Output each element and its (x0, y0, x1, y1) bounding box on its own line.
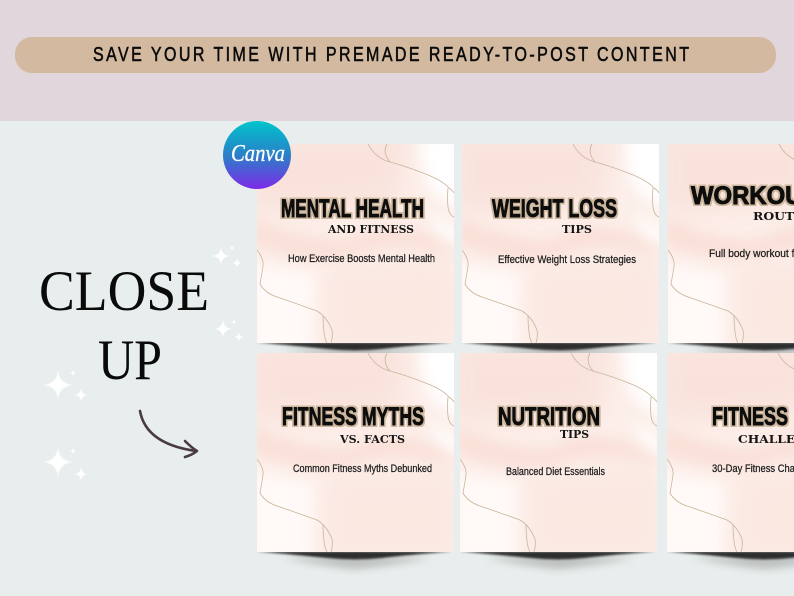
sparkles: group three (43, 369, 88, 402)
subtitle: tips: TIPS (560, 428, 589, 441)
icon: canva badge (223, 121, 291, 189)
top banner band (0, 0, 794, 121)
heading: close up: CLOSE (39, 260, 209, 323)
title: fitness myths: FITNESS MYTHS (282, 403, 424, 431)
panel: weight loss card (452, 134, 672, 360)
subtitle: and fitness: AND FITNESS (327, 223, 414, 236)
title: nutrition: NUTRITION (498, 403, 600, 431)
subtitle: tips: TIPS (562, 223, 592, 236)
sparkles: group four (43, 447, 88, 481)
caption: Common Fitness Myths Debunked (293, 463, 432, 475)
subtitle: vs facts: VS. FACTS (339, 433, 405, 446)
caption: How Exercise Boosts Mental Health (288, 253, 435, 265)
panel: nutrition card (450, 343, 670, 569)
title: weight loss: WEIGHT LOSS (492, 195, 617, 223)
icon: canva badge: Canva (231, 141, 285, 167)
panel: fitness challenge card (657, 343, 794, 569)
heading: close up (39, 260, 209, 392)
sparkles: group two (214, 319, 244, 342)
headline pill: SAVE YOUR TIME WITH PREMADE READY-TO-POST CONTENT (93, 43, 689, 65)
heading: close up: UP (98, 329, 162, 392)
sparkles: group one (212, 245, 242, 268)
title: mental health: MENTAL HEALTH (281, 195, 424, 223)
caption: Balanced Diet Essentials (506, 466, 605, 478)
arrow (140, 411, 197, 457)
panel: mental health card (247, 134, 467, 360)
caption: Effective Weight Loss Strategies (498, 254, 636, 266)
panel: fitness myths card (247, 343, 467, 569)
panel: workout routine card (658, 134, 794, 360)
headline pill (15, 37, 776, 73)
